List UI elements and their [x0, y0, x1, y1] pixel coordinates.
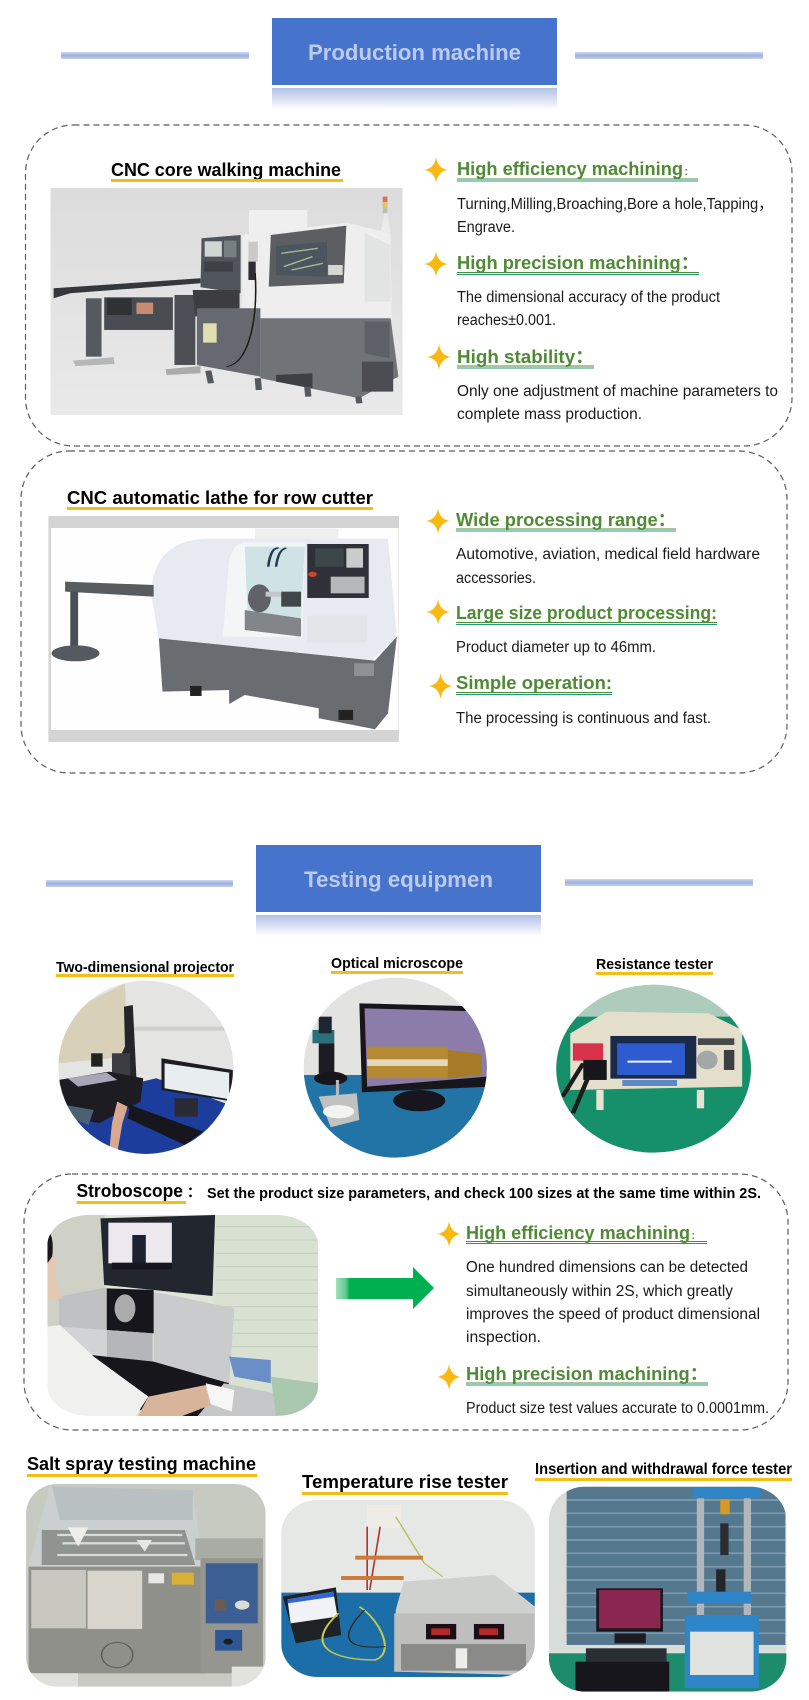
- photo: salt spray testing machine: [26, 1484, 266, 1687]
- feature: high stability: [427, 344, 778, 423]
- feature: large size product processing: [426, 599, 717, 656]
- feature: high efficiency: [437, 1221, 760, 1346]
- feature: high precision: [424, 251, 721, 329]
- section header: Testing equipmen: Testing equipmen: [304, 867, 493, 892]
- heading: Stroboscope: ：: [187, 1184, 201, 1200]
- features: Stroboscope: [437, 1221, 769, 1417]
- feature: wide processing range: [426, 508, 760, 587]
- feature: simple operation: The processing is continuous and fast.: [456, 710, 711, 727]
- photo: two-dimensional projector: [52, 980, 240, 1157]
- label: Salt spray testing machine: Salt spray testing machine: [27, 1454, 256, 1474]
- heading: CNC automatic lathe for row cutter: CNC automatic lathe for row cutter: [67, 488, 373, 508]
- panel: CNC core walking machine: [26, 125, 792, 446]
- label: Two-dimensional projector: Two-dimensional projector: [56, 959, 234, 976]
- arrow: green arrow to the right: [336, 1267, 434, 1309]
- feature: high efficiency: simultaneously within 2S, which greatly: [466, 1283, 733, 1300]
- photo: CNC automatic lathe: [48, 516, 399, 742]
- photo: temperature rise tester: [281, 1500, 535, 1677]
- section header: Production machine: Production machine: [308, 40, 521, 65]
- feature: high stability: High stability：: [457, 347, 594, 367]
- photo: CNC core walking machine: [51, 188, 403, 415]
- label: Temperature rise tester: Temperature rise tester: [302, 1472, 508, 1492]
- feature: large size product processing: Large size product processing:: [456, 603, 717, 623]
- feature: high efficiency: ：: [684, 167, 693, 177]
- feature: simple operation: Simple operation:: [456, 673, 612, 693]
- photo: insertion and withdrawal force tester: [549, 1487, 786, 1692]
- feature: large size product processing: Product diameter up to 46mm.: [456, 639, 656, 656]
- feature: wide processing range: accessories.: [456, 570, 536, 587]
- feature: high efficiency: High efficiency machining: [466, 1223, 690, 1243]
- feature: high stability: complete mass production.: [457, 406, 642, 423]
- feature: high precision: reaches±0.001.: [457, 312, 556, 329]
- panel: Stroboscope: [24, 1174, 788, 1430]
- feature: high precision: Product size test values accurate to 0.0001mm.: [466, 1400, 769, 1417]
- feature: wide processing range: Automotive, aviation, medical field hardware: [456, 546, 760, 563]
- feature: high precision: [437, 1364, 769, 1417]
- feature: high efficiency: High efficiency machining: [457, 159, 683, 179]
- photo: resistance tester: [552, 983, 755, 1155]
- features: CNC core walking machine: [424, 157, 778, 423]
- section header: Testing equipmen: [46, 845, 753, 936]
- heading: Stroboscope: Stroboscope: [76, 1181, 183, 1201]
- feature: high efficiency: Turning,Milling,Broaching,Bore a hole,Tapping，: [457, 196, 773, 213]
- features: CNC automatic lathe: [426, 508, 760, 727]
- feature: high stability: Only one adjustment of machine parameters to: [457, 383, 778, 400]
- panel: CNC automatic lathe: [21, 451, 787, 773]
- feature: high efficiency: One hundred dimensions can be detected: [466, 1259, 748, 1276]
- label: Optical microscope: Optical microscope: [331, 955, 463, 972]
- section header: Production machine: [61, 18, 763, 110]
- feature: high efficiency: Engrave.: [457, 219, 515, 236]
- photo: stroboscope: [47, 1215, 318, 1416]
- photo: optical microscope: [297, 977, 495, 1160]
- feature: high precision: The dimensional accuracy of the product: [457, 289, 721, 306]
- feature: high efficiency: improves the speed of product dimensional: [466, 1306, 760, 1323]
- heading: CNC core walking machine: CNC core walking machine: [111, 160, 341, 180]
- label: Insertion and withdrawal force tester: Insertion and withdrawal force tester: [535, 1461, 792, 1478]
- label: Resistance tester: Resistance tester: [596, 956, 713, 973]
- feature: high precision: High precision machining：: [466, 1364, 708, 1384]
- feature: wide processing range: Wide processing range：: [456, 510, 676, 530]
- text: stroboscope description: Set the product size parameters, and check 100 sizes at the same time within 2S.: [207, 1185, 761, 1202]
- feature: simple operation: [428, 673, 711, 727]
- feature: high efficiency: inspection.: [466, 1329, 541, 1346]
- feature: high precision: High precision machining：: [457, 253, 699, 273]
- feature: high efficiency: ：: [691, 1231, 700, 1241]
- feature: high efficiency: [424, 157, 773, 236]
